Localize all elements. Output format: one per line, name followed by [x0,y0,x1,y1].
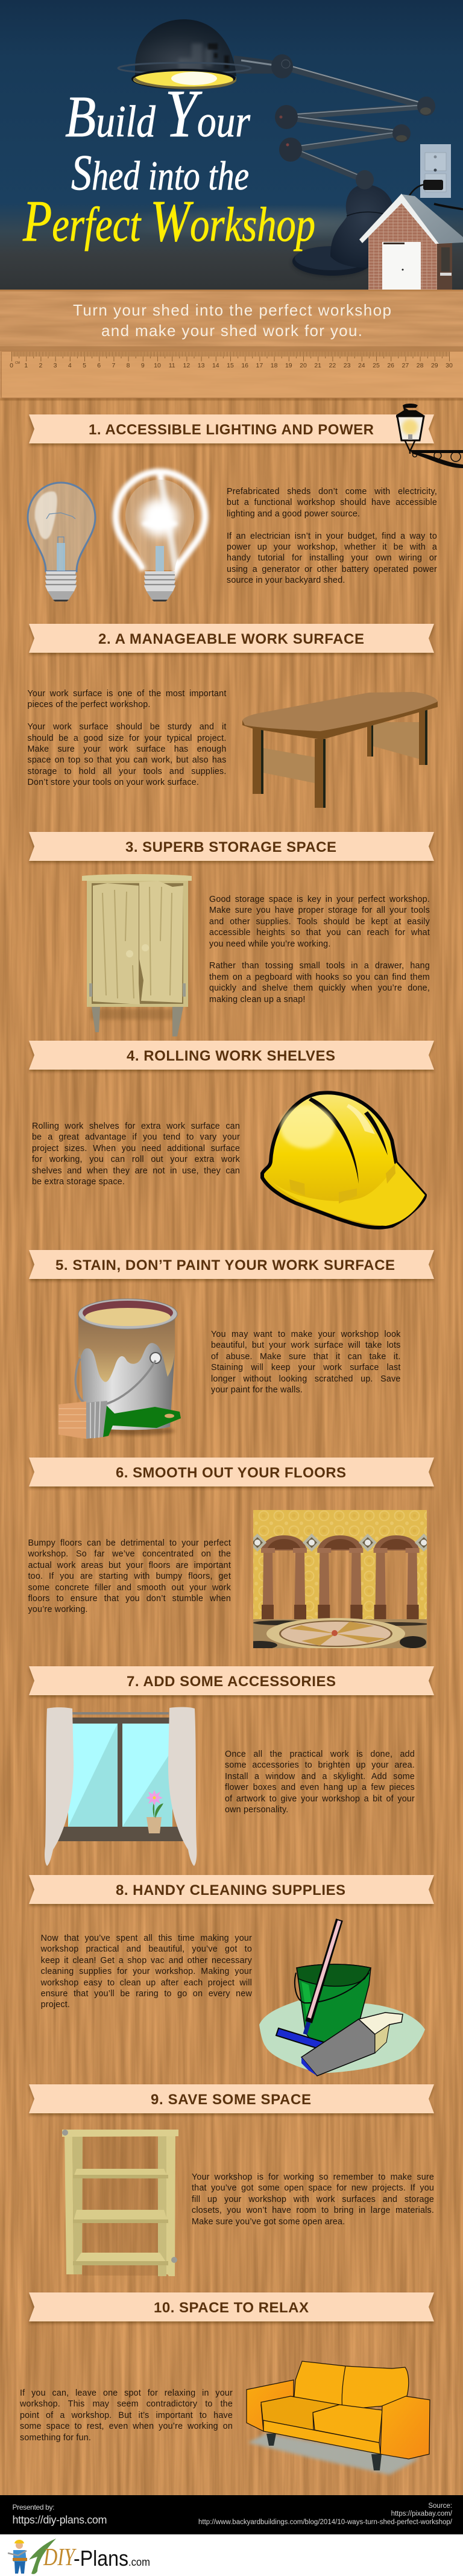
text: lighting [227,487,437,585]
footer bar: https://pixabay.com/ [391,2510,453,2517]
subtitle: Turn your shed into the perfect workshop [73,301,391,319]
icon: sofa [247,2361,430,2475]
text: accessories: some accessories to brighten up your area. [225,1760,415,1770]
desk lamp [118,19,435,278]
ruler: 10 [154,362,161,369]
text: work surface: Your work surface is one of the most important [28,689,227,699]
ruler: 24 [358,362,365,369]
heading 5: 5. STAIN, DON’T PAINT YOUR WORK SURFACE [55,1257,395,1274]
text: relax: point of a workshop. But it’s important to have [20,2411,233,2420]
ruler: 4 [68,362,72,369]
heading 7: 7. ADD SOME ACCESSORIES [127,1673,336,1690]
heading 4 [29,1041,434,1070]
icon: window with curtains [45,1707,197,1866]
text: work surface: Your work surface should be sturdy and it [28,722,227,732]
subtitle [73,301,391,340]
text: lighting: using a generator or other battery operated power [227,565,437,574]
picture: arches and mosaic floor [253,1510,427,1648]
ruler: 25 [373,362,380,369]
text: storage: you need while you’re working. [209,939,331,949]
logo: DIY [43,2543,77,2571]
ruler: 30 [446,362,453,369]
footer bar: https://diy-plans.com [12,2514,107,2526]
text: floors: workshop. So far we’ve concentrated on the [28,1549,231,1559]
text: floors: you’re working. [28,1605,88,1614]
heading 10: 10. SPACE TO RELAX [154,2300,309,2316]
text: stain: beautiful, but your work surface will take lots [211,1340,400,1350]
heading 1: 1. ACCESSIBLE LIGHTING AND POWER [89,422,374,438]
text: relax: something for fun. [20,2433,91,2443]
ruler [1,351,463,398]
ruler: 9 [141,362,145,369]
subtitle: and make your shed work for you. [101,322,362,340]
text: rolling shelves: be extra storage space. [32,1177,125,1187]
icon: cabinet [82,874,192,1036]
text: lighting: but a functional workshop should have accessible [227,498,437,507]
text: floors: too. If you are starting with bumpy floors, get [28,1572,231,1581]
text: floors: actual work areas but your floors are important [28,1561,231,1570]
text: save space: Your workshop is for working so remember to make sure [192,2172,434,2182]
text: lighting: Prefabricated sheds don’t come with electricity, [227,487,437,496]
text: lighting: source in your backyard shed. [227,576,345,585]
heading 4: 4. ROLLING WORK SHELVES [127,1048,335,1064]
text: floors [28,1538,231,1614]
text: work surface [28,689,227,787]
text: lighting: power up your workshop, whether it be with a [227,542,437,552]
ruler: 21 [314,362,321,369]
title [22,77,315,254]
text: stain: your paint for the walls. [211,1385,303,1395]
text: storage: and other supplies. Tools should be kept at easily [209,917,430,927]
ruler: 12 [183,362,190,369]
text: cleaning: project. [41,2000,70,2010]
ruler: 27 [402,362,409,369]
text: relax: workshop. This may seem contradictory to the [20,2399,233,2409]
heading 9: 9. SAVE SOME SPACE [151,2092,311,2108]
text: cleaning: workshop practical and beautiful, you’ve got to [41,1944,252,1954]
text: work surface: Don’t store your tools on your work surface. [28,778,199,787]
text: storage [209,895,430,1004]
heading 5 [29,1250,434,1279]
ruler: 29 [431,362,438,369]
wall socket [409,144,463,209]
ruler: CM [15,361,20,365]
hero panel [0,0,463,290]
text: accessories: of artwork to give your workshop a bit of your [225,1794,415,1804]
icon: unlit bulb [28,483,95,601]
ruler: 16 [241,362,248,369]
text: lighting: If an electrician isn’t in your budget, find a way to [227,531,437,541]
text: storage: making clean up a snap! [209,995,306,1004]
logo: -Plans [74,2546,128,2571]
heading 1 [29,414,434,443]
logo [8,2539,150,2574]
plank shadow [0,398,463,401]
heading 6 [29,1458,434,1486]
ruler: 5 [83,362,86,369]
text: storage: Make sure you have proper storage for all your tools [209,906,430,915]
text: storage: them on a pegboard with hooks so you can find them [209,972,430,982]
ruler: 22 [329,362,336,369]
icon: wooden shelves [62,2130,178,2276]
text: accessories: Once all the practical work is done, add [225,1750,415,1759]
ruler: 0 [10,362,13,369]
ruler: 3 [54,362,57,369]
text: floors: Bumpy floors can be detrimental to your perfect [28,1538,231,1548]
text: storage: Good storage space is key in your perfect workshop. [209,895,430,904]
ruler: 13 [198,362,205,369]
heading 9 [29,2084,434,2113]
heading 2: 2. A MANAGEABLE WORK SURFACE [98,631,364,647]
text: relax: If you can, leave one spot for relaxing in your [20,2388,233,2398]
text: accessories: flower boxes and even hang up a few pieces [225,1783,415,1792]
ruler: 7 [112,362,115,369]
text: rolling shelves [32,1121,240,1187]
text: rolling shelves: Rolling work shelves for extra work surface can [32,1121,240,1131]
text: storage: accessible heights so that you can reach for what [209,928,430,937]
heading 7 [29,1666,434,1695]
text: accessories [225,1750,415,1815]
text: stain [211,1330,400,1395]
ruler: 20 [300,362,307,369]
heading 2 [29,624,434,653]
ruler: 18 [271,362,278,369]
text: lighting: handy tutorial for installing your own wiring or [227,553,437,563]
text: save space [192,2172,434,2227]
text: save space: Make sure you’ve got some open area. [192,2217,345,2227]
brick shed [359,194,463,290]
wood plank with subtitle [0,290,463,398]
text: accessories: own personality. [225,1805,288,1815]
text: storage: quickly and shelve them quickly when you’re done, [209,983,430,993]
logo: .com [128,2556,150,2568]
text: stain: longer without looking scratched up. Save [211,1374,400,1384]
ruler: 28 [417,362,424,369]
ruler: 23 [344,362,351,369]
text: floors: floors to ensure that you don’t stumble when [28,1594,231,1604]
text: cleaning: cleaning supplies for your workshop. Making your [41,1967,252,1976]
title: Shed into the [71,145,249,201]
icon: table [242,692,438,808]
text: work surface: Make sure your work surface has enough [28,744,227,754]
text: rolling shelves: project sizes. When you need additional surface [32,1144,240,1153]
heading 8 [29,1875,434,1904]
text: work surface: storage to hold all your tools and supplies. [28,767,227,776]
text: floors: some concrete filler and smooth out your work [28,1583,231,1593]
text: work surface: space on top so that you can work, but also has [28,755,227,765]
heading 3: 3. SUPERB STORAGE SPACE [125,839,336,855]
icon: paint can and brush [58,1299,181,1439]
ruler: 11 [169,362,175,369]
heading 10 [29,2292,434,2321]
text: save space: fill up your workshop with work surfaces and storage [192,2195,434,2204]
text: save space: that you’ve got some open space for new projects. If you [192,2183,434,2193]
ruler: 26 [387,362,394,369]
ruler: 2 [39,362,42,369]
text: relax [20,2388,233,2443]
title: Perfect Workshop [22,189,315,254]
footer bar: Presented by: [12,2503,54,2511]
ruler: 19 [285,362,292,369]
text: work surface: pieces of the perfect workshop. [28,700,151,709]
heading 8: 8. HANDY CLEANING SUPPLIES [116,1882,345,1899]
text: stain: Staining will keep your work surface last [211,1363,400,1372]
ruler: 8 [127,362,130,369]
text: work surface: should be a good size for your typical project. [28,734,227,743]
text: cleaning: keep it clean! Get a shop vac and other necessary [41,1956,252,1965]
text: lighting: lighting and a good power source. [227,509,360,519]
ruler: 15 [227,362,234,369]
title: Build Your [65,77,251,151]
text: stain: You may want to make your workshop look [211,1330,400,1339]
text: storage: Rather than tossing small tools in a drawer, hang [209,961,430,971]
footer bar: Source: [428,2502,452,2510]
text: stain: of abuse. Make sure that it can take it. [211,1352,400,1362]
footer bar: http://www.backyardbuildings.com/blog/2014/10-ways-turn-shed-perfect-workshop/ [198,2519,453,2526]
ruler: 14 [212,362,219,369]
text: cleaning [41,1934,252,2010]
icon: street lantern [396,404,463,468]
icon: hard hat [262,1093,425,1228]
text: cleaning: Now that you’ve spent all this time making your [41,1934,252,1943]
heading 3 [29,832,434,861]
ruler: 1 [24,362,28,369]
icon: lit bulb [116,472,205,601]
logo worker [8,2540,27,2574]
text: cleaning: ensure that you’ll be raring to go on every new [41,1989,252,1999]
heading 6: 6. SMOOTH OUT YOUR FLOORS [116,1465,346,1481]
text: accessories: Install a window and a skylight. Add some [225,1772,415,1781]
text: save space: closets, you won’t have room to bring in large materials. [192,2206,434,2215]
text: relax: some space to rest, even when you’re working on [20,2422,233,2431]
text: rolling shelves: shelves and when they are not in use, they can [32,1166,240,1176]
text: rolling shelves: for working, you can roll out your extra work [32,1155,240,1164]
text: rolling shelves: be a great advantage if you tend to vary your [32,1132,240,1142]
footer bar [0,2495,463,2576]
ruler: 17 [256,362,263,369]
icon: bucket, mop and vacuum [259,1920,425,2076]
ruler: 6 [97,362,101,369]
text: cleaning: workshop easy to clean up after each project will [41,1978,252,1988]
